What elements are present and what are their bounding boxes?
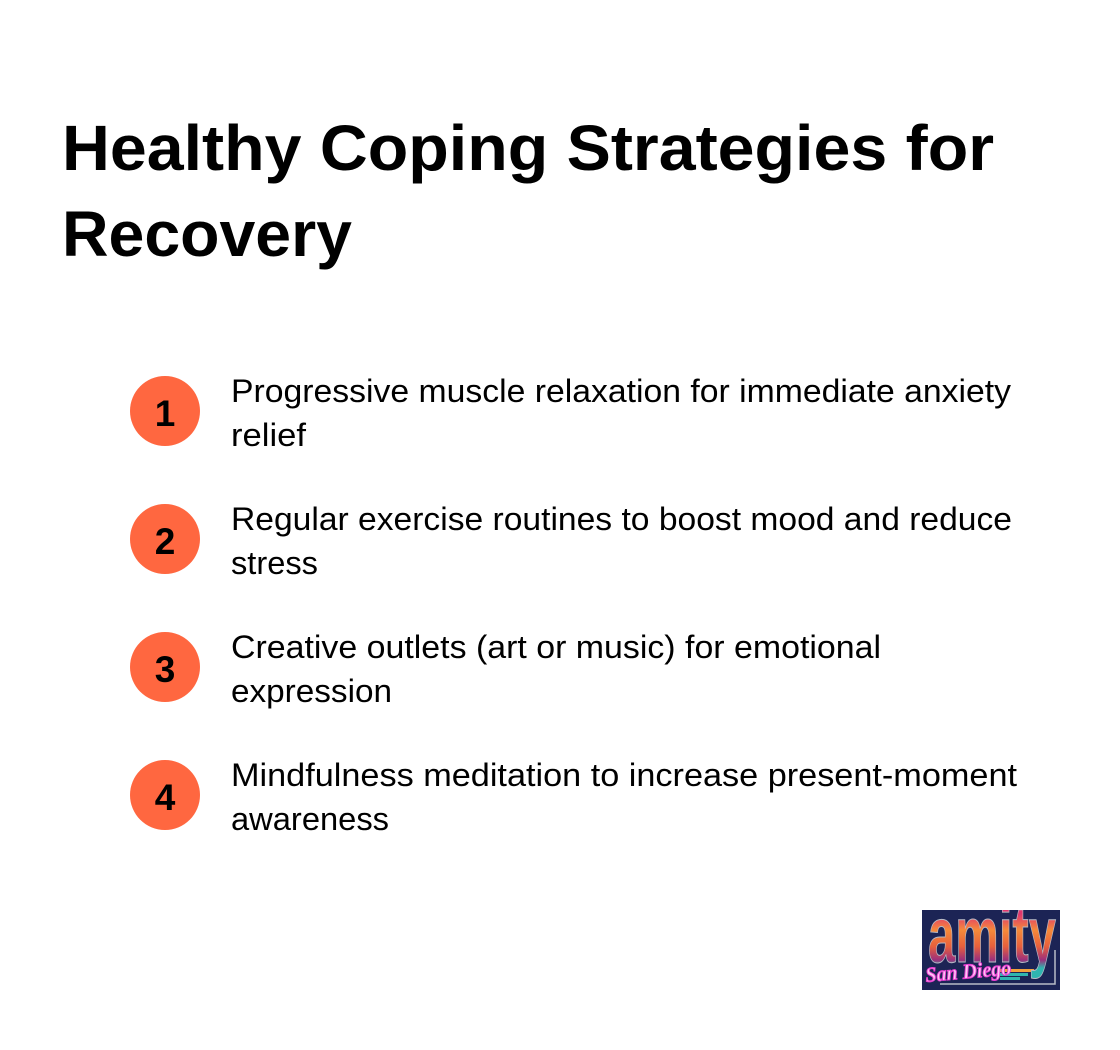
- number badge 4: [130, 760, 200, 830]
- title: [62, 112, 994, 270]
- number badge 3: 3: [155, 649, 175, 690]
- number badge 2: 2: [155, 521, 175, 562]
- list item 3: [130, 629, 881, 709]
- number badge 1: [130, 376, 200, 446]
- item 3 text: [231, 629, 881, 709]
- list item 1: [130, 373, 1012, 453]
- number badge 2: [130, 504, 200, 574]
- list item 2: [130, 501, 1012, 581]
- logo outline strip: [940, 950, 1055, 984]
- item 1 text: Progressive muscle relaxation for immediate anxiety: [231, 373, 1012, 409]
- title: Recovery: [62, 198, 352, 270]
- number badge 3: [130, 632, 200, 702]
- item 2 text: Regular exercise routines to boost mood and reduce: [231, 501, 1012, 537]
- item 1 text: [231, 373, 1012, 453]
- item 4 text: awareness: [231, 801, 389, 837]
- number badge 1: 1: [155, 393, 175, 434]
- logo script: San Diego: [924, 956, 1012, 987]
- logo colour streaks: [1000, 969, 1034, 980]
- number badge 4: 4: [155, 777, 176, 818]
- logo: Amity San Diego: [922, 910, 1060, 990]
- item 4 text: [231, 757, 1017, 837]
- item 2 text: [231, 501, 1012, 581]
- item 2 text: stress: [231, 545, 318, 581]
- item 3 text: expression: [231, 673, 392, 709]
- item 3 text: Creative outlets (art or music) for emotional: [231, 629, 881, 665]
- item 1 text: relief: [231, 417, 307, 453]
- list item 4: [130, 757, 1017, 837]
- title: Healthy Coping Strategies for: [62, 112, 994, 184]
- item 4 text: Mindfulness meditation to increase present-moment: [231, 757, 1017, 793]
